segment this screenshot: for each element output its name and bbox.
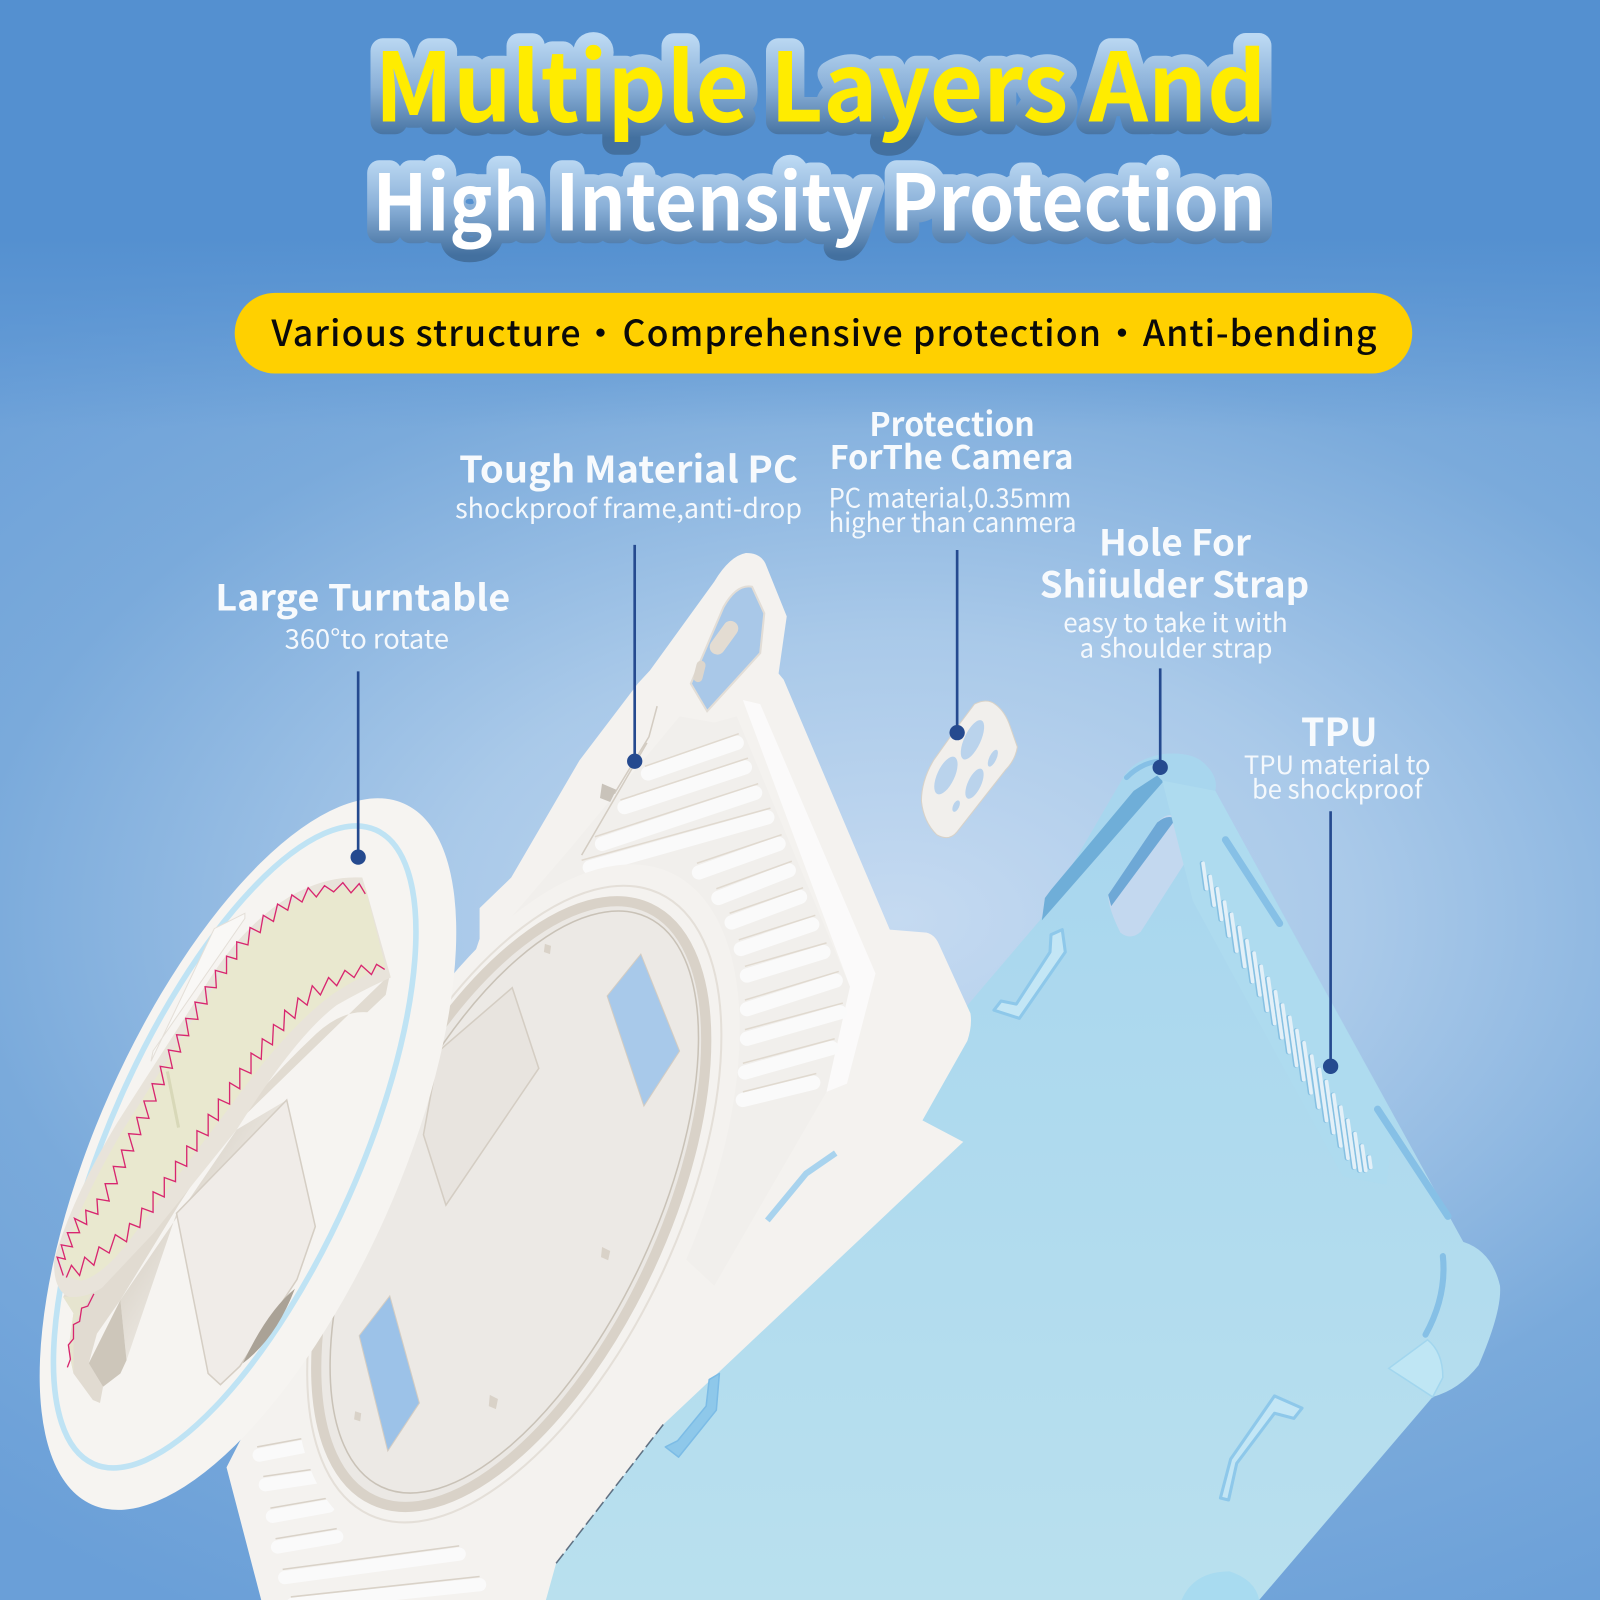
small tab: [600, 784, 616, 802]
louvre shadow lines: [582, 734, 843, 1092]
lower rectangular window: [359, 1296, 419, 1451]
strap underside: [63, 974, 390, 1403]
clip lower left: [665, 1373, 719, 1457]
hole top: [956, 717, 989, 763]
frame body: [227, 553, 971, 1600]
strap inner dark: [89, 1300, 127, 1387]
side button slots: [1226, 840, 1448, 1216]
strap lower cream: [63, 1294, 92, 1372]
blue ring: [0, 779, 490, 1515]
ribbed side band: [1162, 781, 1394, 1185]
turntable disc: [0, 742, 542, 1566]
label: large turntable: 360°to rotate: [285, 617, 449, 656]
button lower: [698, 665, 701, 678]
leader: strap hole: [1153, 668, 1168, 775]
label: protection for the camera: ForThe Camera: [830, 432, 1073, 479]
strap shading seam: [167, 1071, 179, 1128]
inner raised plate: [423, 988, 539, 1205]
hole left: [929, 753, 962, 798]
turntable: [0, 742, 542, 1566]
label: TPU: TPU: [1301, 702, 1378, 758]
label: hole for shoulder strap: a shoulder strap: [1080, 629, 1272, 666]
leader: TPU: [1323, 811, 1338, 1074]
label: large turntable: Large Turntable: [215, 571, 510, 622]
label: protection for the camera: Protection: [869, 399, 1035, 446]
louvre strips: [590, 743, 840, 1100]
camera opening in frame: [691, 586, 764, 711]
title line 1: Multiple Layers And: [374, 12, 1266, 149]
strap face: [61, 887, 386, 1281]
label: tough material PC: Tough Material PC: [459, 440, 798, 494]
leader: turntable: [351, 671, 366, 865]
label: tough material PC: [455, 440, 802, 526]
yellow subtitle pill: Anti-bending: [1143, 306, 1377, 357]
hole right: [962, 766, 987, 801]
tan ring: [235, 844, 787, 1564]
frame camera buttons: [698, 629, 731, 678]
camera window: [1108, 815, 1190, 936]
lower white ring band: [203, 798, 832, 1600]
label: large turntable: [215, 571, 510, 656]
clip lower: [1220, 1396, 1302, 1500]
screw bosses: [354, 944, 610, 1421]
lower louvre shadow: [257, 1437, 480, 1597]
side slit and seam: [582, 706, 657, 855]
case body: [541, 754, 1500, 1600]
button upper: [717, 629, 731, 647]
side channel recess: [1042, 776, 1163, 920]
strap: [54, 877, 391, 1403]
yellow subtitle pill: ·: [583, 306, 618, 357]
clip on white frame: [767, 1153, 836, 1220]
top corner slit: [1127, 761, 1158, 778]
leader: PC frame: [627, 545, 642, 769]
label: hole for shoulder strap: [1040, 516, 1309, 666]
vent slot highlights: [1203, 863, 1371, 1170]
white PC frame: [203, 553, 971, 1600]
louvre panel: [429, 716, 850, 1286]
camera window shade: [1108, 817, 1176, 906]
yellow subtitle pill: Various structure: [270, 306, 581, 357]
clip left: [994, 930, 1065, 1018]
camera lens protector: [921, 701, 1017, 838]
upper stitches: [57, 883, 365, 1276]
label: hole for shoulder strap: Shiiulder Strap: [1040, 557, 1309, 608]
back panel outline: [151, 913, 245, 1061]
vent slots shadow: [1202, 863, 1370, 1170]
hole small: [986, 748, 1000, 768]
disc rear shading: [120, 1100, 287, 1360]
lens holes: [929, 717, 1000, 813]
leader: camera: [949, 550, 965, 740]
label: protection for the camera: PC material,0.35mm: [829, 477, 1071, 516]
strap top border: [54, 877, 391, 1297]
label: TPU: [1244, 702, 1431, 806]
lower louvre strips: [259, 1445, 480, 1600]
label: TPU: TPU material to: [1244, 745, 1431, 782]
lower stitches: [66, 964, 385, 1278]
label: protection for the camera: [829, 399, 1077, 540]
label: tough material PC: shockproof frame,anti-drop: [455, 487, 802, 526]
label: TPU: be shockproof: [1252, 769, 1424, 806]
label: hole for shoulder strap: Hole For: [1099, 516, 1251, 567]
louvre outer strip: [743, 700, 876, 1092]
yellow subtitle pill: Comprehensive protection: [622, 306, 1101, 357]
bottom bumper: [1182, 1571, 1259, 1600]
yellow subtitle pill: ·: [1104, 306, 1140, 357]
inner shaded panel: [177, 1100, 315, 1385]
title: [372, 12, 1266, 254]
hole sliver: [243, 1289, 295, 1363]
inner ring edge: [254, 858, 775, 1546]
yellow subtitle pill: [235, 293, 1412, 373]
upper rectangular window: [607, 954, 680, 1106]
corner slit: [1426, 1256, 1444, 1335]
blue TPU case: [541, 754, 1500, 1600]
frame dark edge: [556, 1424, 663, 1563]
label: protection for the camera: higher than canmera: [829, 501, 1077, 540]
corner bumper fold: [1389, 1340, 1443, 1397]
ring shadow line: [221, 824, 807, 1584]
underside stitches: [67, 1294, 94, 1367]
label: hole for shoulder strap: easy to take it with: [1063, 603, 1288, 640]
title line 2: High Intensity Protection: [372, 142, 1265, 254]
hole tiny: [951, 799, 961, 813]
background top tint: [0, 0, 1600, 429]
